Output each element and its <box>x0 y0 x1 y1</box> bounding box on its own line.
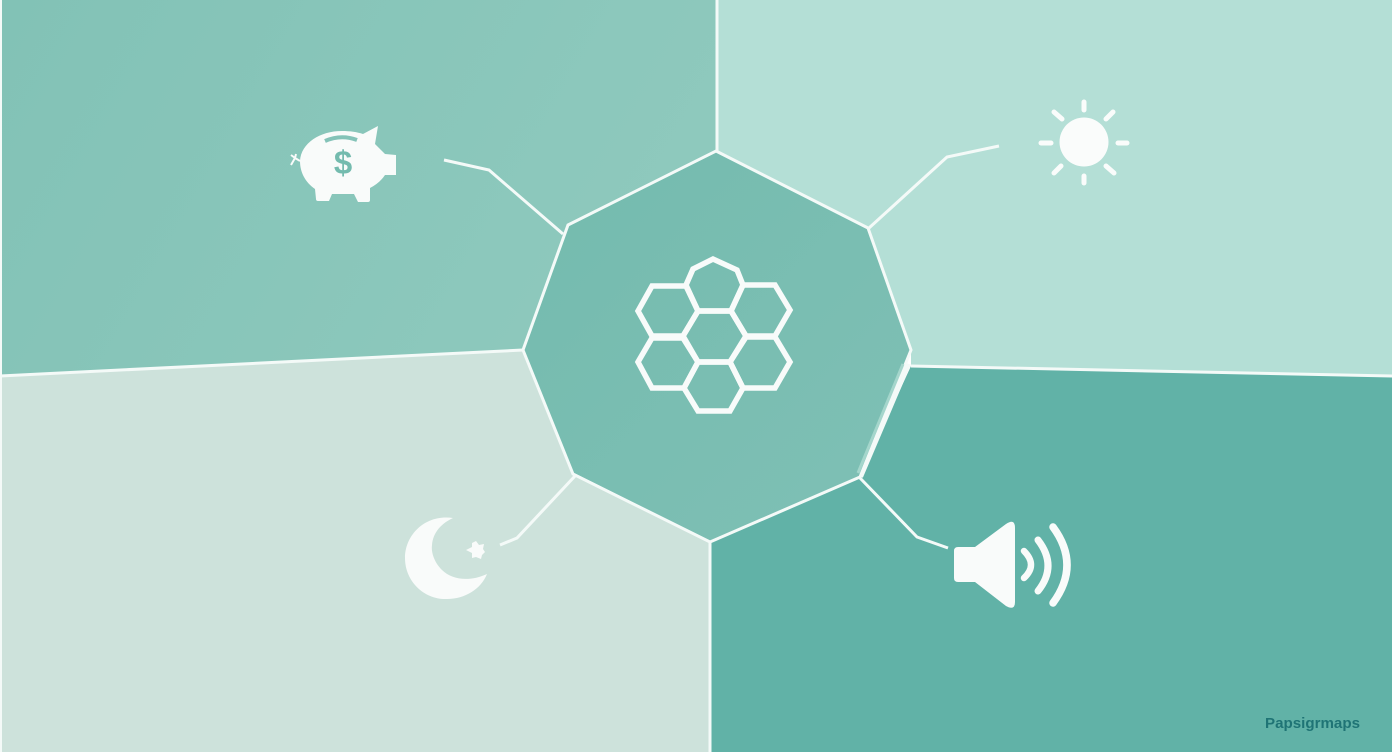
connector: piggy bank to octagon <box>444 160 563 234</box>
icon: speaker <box>954 522 1067 608</box>
icon: crescent moon and star <box>405 518 487 599</box>
connector: sun to octagon <box>869 146 999 228</box>
panel: bottom right <box>710 366 1392 752</box>
panel: central octagon <box>523 151 911 542</box>
icon: honeycomb <box>638 259 790 411</box>
icon: piggy bank: $ <box>334 144 352 181</box>
connector: moon to octagon <box>500 476 575 545</box>
panel: top right <box>716 0 1392 376</box>
panel: bottom left <box>2 350 710 752</box>
panel: top left <box>2 0 716 376</box>
watermark text: Papsigrmaps <box>1265 716 1360 732</box>
connector: speaker to octagon <box>860 478 948 548</box>
icon: sun <box>1041 102 1127 183</box>
icon: piggy bank <box>291 126 396 202</box>
